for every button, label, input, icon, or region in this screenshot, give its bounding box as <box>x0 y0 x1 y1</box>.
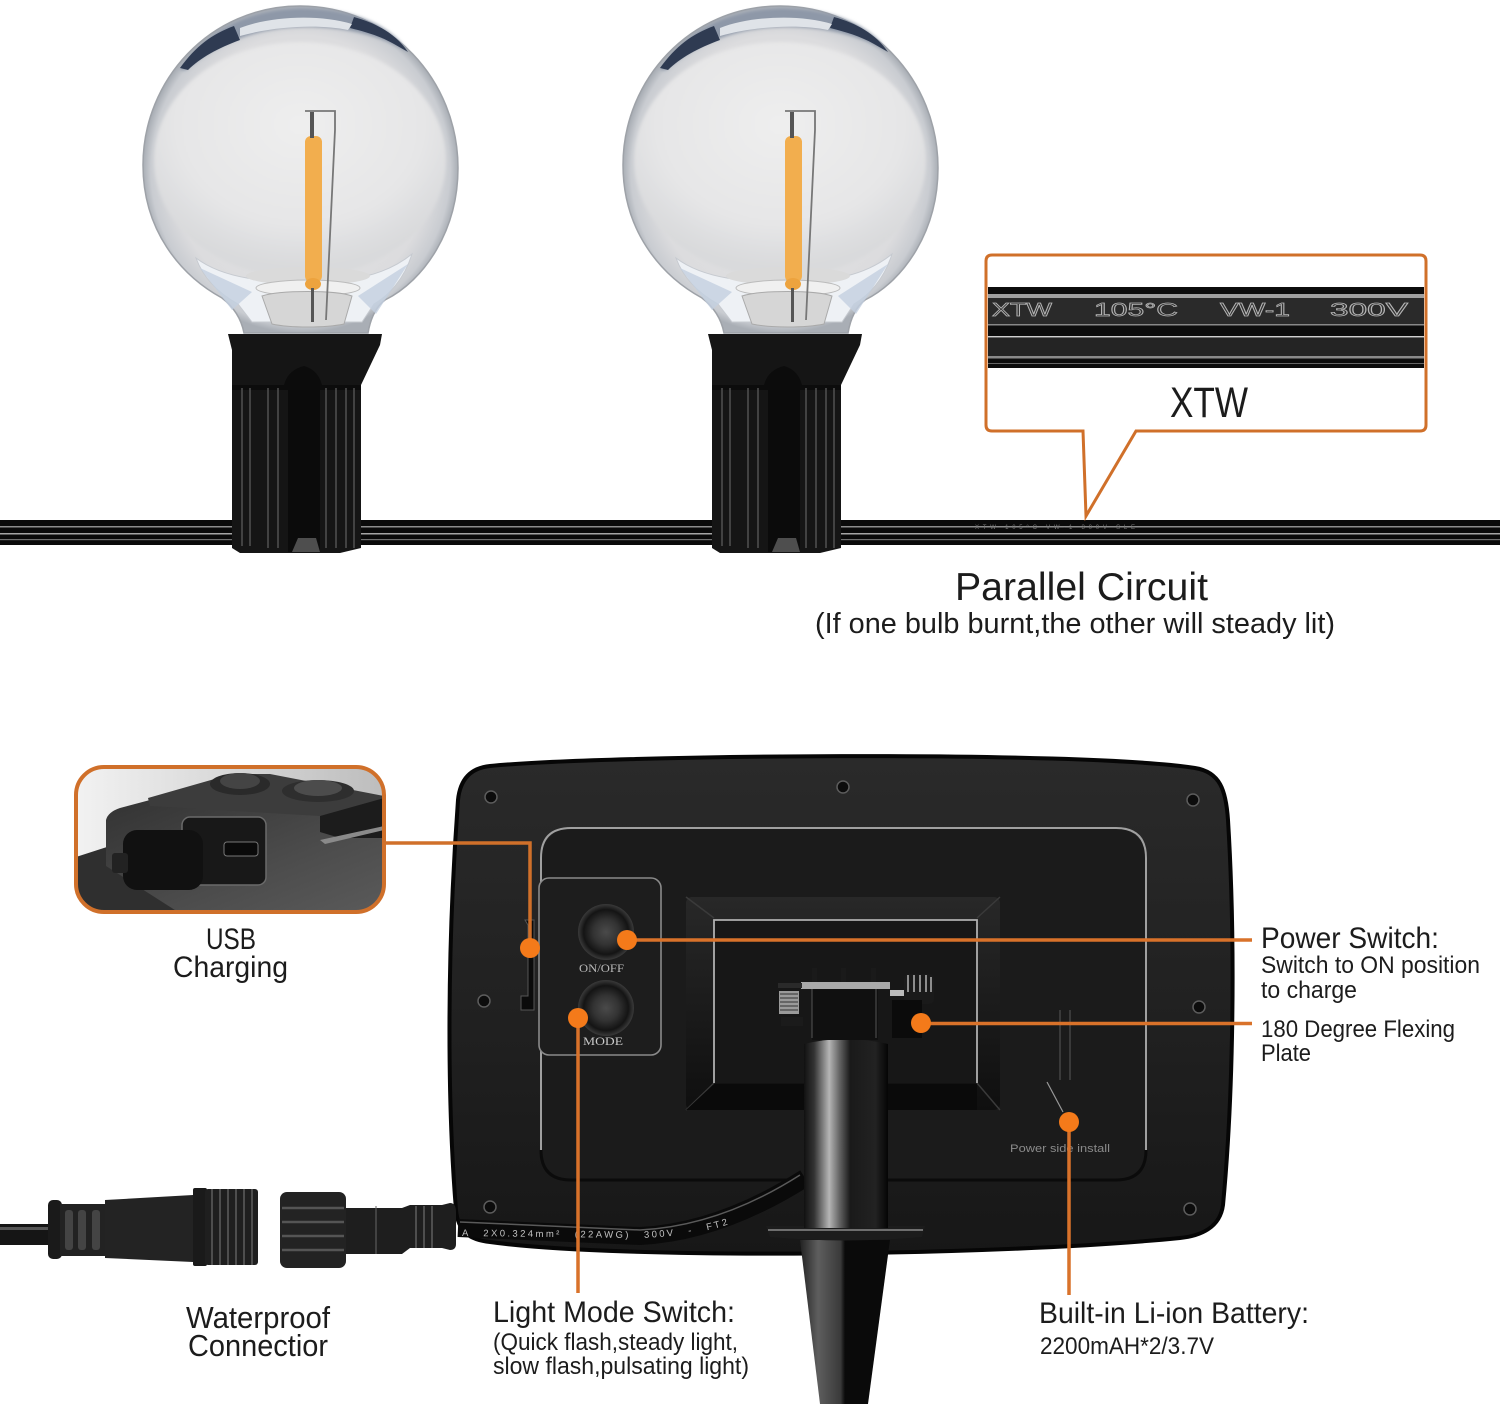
glass globe <box>143 6 458 333</box>
mounting recess <box>686 897 1000 1110</box>
wire close-up photo: 300V <box>1330 300 1408 320</box>
label: USB charging: Charging <box>173 951 288 984</box>
leader: battery <box>1059 1112 1079 1295</box>
panel cable <box>458 1170 804 1245</box>
label: USB charging <box>173 923 288 984</box>
callout bubble outline <box>986 255 1426 516</box>
label: waterproof connector <box>186 1300 330 1363</box>
on/off button <box>578 904 634 960</box>
mode button <box>578 980 634 1036</box>
ground stake <box>766 968 934 1404</box>
leader: flexing plate <box>911 1013 1252 1033</box>
label: battery: Built-in Li-ion Battery: <box>1039 1297 1309 1330</box>
screws <box>478 781 1205 1215</box>
label: light mode switch: slow flash,pulsating light) <box>493 1353 749 1380</box>
heading: Parallel Circuit: Parallel Circuit <box>955 566 1208 609</box>
label: light mode switch: Light Mode Switch: <box>493 1296 735 1329</box>
stake flange <box>766 1226 925 1240</box>
panel cable: A 2X0.324mm² (22AWG) 300V - FT2 <box>462 1218 728 1240</box>
swivel clamp <box>778 968 934 1040</box>
control box: MODE <box>583 1034 623 1048</box>
wire close-up photo: 105°C <box>1094 300 1178 320</box>
control box: ON/OFF <box>579 961 624 975</box>
label: power switch: to charge <box>1261 977 1357 1004</box>
stake spike <box>800 1240 890 1404</box>
power cord with bulbs' wire: XTW 105°C VW-1 300V SLE <box>975 525 1135 531</box>
label: flexing plate <box>1261 1016 1455 1067</box>
leader: light mode switch <box>568 1008 588 1293</box>
label: light mode switch: (Quick flash,steady light, <box>493 1329 738 1356</box>
leader: USB charging <box>385 843 540 958</box>
label: flexing plate: 180 Degree Flexing <box>1261 1016 1455 1043</box>
solar panel back <box>447 754 1235 1256</box>
inner raised rim <box>541 828 1146 1180</box>
light bulb right <box>623 6 938 553</box>
USB charging inset <box>76 767 384 912</box>
bulb lower bowl and neck <box>196 254 412 322</box>
lamp socket <box>228 334 382 553</box>
label: flexing plate: Plate <box>1261 1040 1311 1067</box>
wire close-up photo <box>988 287 1424 368</box>
waterproof connector female <box>280 1192 456 1268</box>
label: light mode switch <box>493 1296 749 1380</box>
power cord with bulbs' wire <box>0 520 1500 545</box>
inset photo <box>76 767 384 912</box>
panel body <box>449 756 1233 1254</box>
label: battery: 2200mAH*2/3.7V <box>1040 1333 1214 1360</box>
arrow marking and install text <box>1010 1010 1110 1155</box>
leader lines and dots <box>385 843 1252 1295</box>
arrow marking and install text: Power side install <box>1010 1143 1110 1155</box>
wire close-up photo: VW-1 <box>1220 300 1290 320</box>
dark top reflection <box>180 8 408 70</box>
XTW label: XTW <box>1170 379 1248 427</box>
label: power switch: Power Switch: <box>1261 922 1439 955</box>
control box <box>539 878 661 1055</box>
callout: XTW wire close-up <box>986 255 1426 516</box>
wire close-up photo: XTW <box>992 300 1052 320</box>
side USB port tab <box>521 920 534 1010</box>
label: power switch <box>1261 922 1480 1004</box>
label: power switch: Switch to ON position <box>1261 952 1480 979</box>
label: USB charging: USB <box>206 923 256 956</box>
light bulb left <box>143 6 458 553</box>
subheading: parallel circuit note: (If one bulb burnt,the other will steady lit) <box>815 608 1335 640</box>
leader: power switch <box>617 930 1252 950</box>
label: waterproof connector: Connectior <box>188 1328 328 1363</box>
filament <box>305 136 322 282</box>
milky interior <box>154 42 446 278</box>
waterproof connector male <box>0 1188 258 1266</box>
label: waterproof connector: Waterproof <box>186 1300 330 1335</box>
label: battery <box>1039 1297 1309 1360</box>
stake tube <box>804 1039 888 1228</box>
